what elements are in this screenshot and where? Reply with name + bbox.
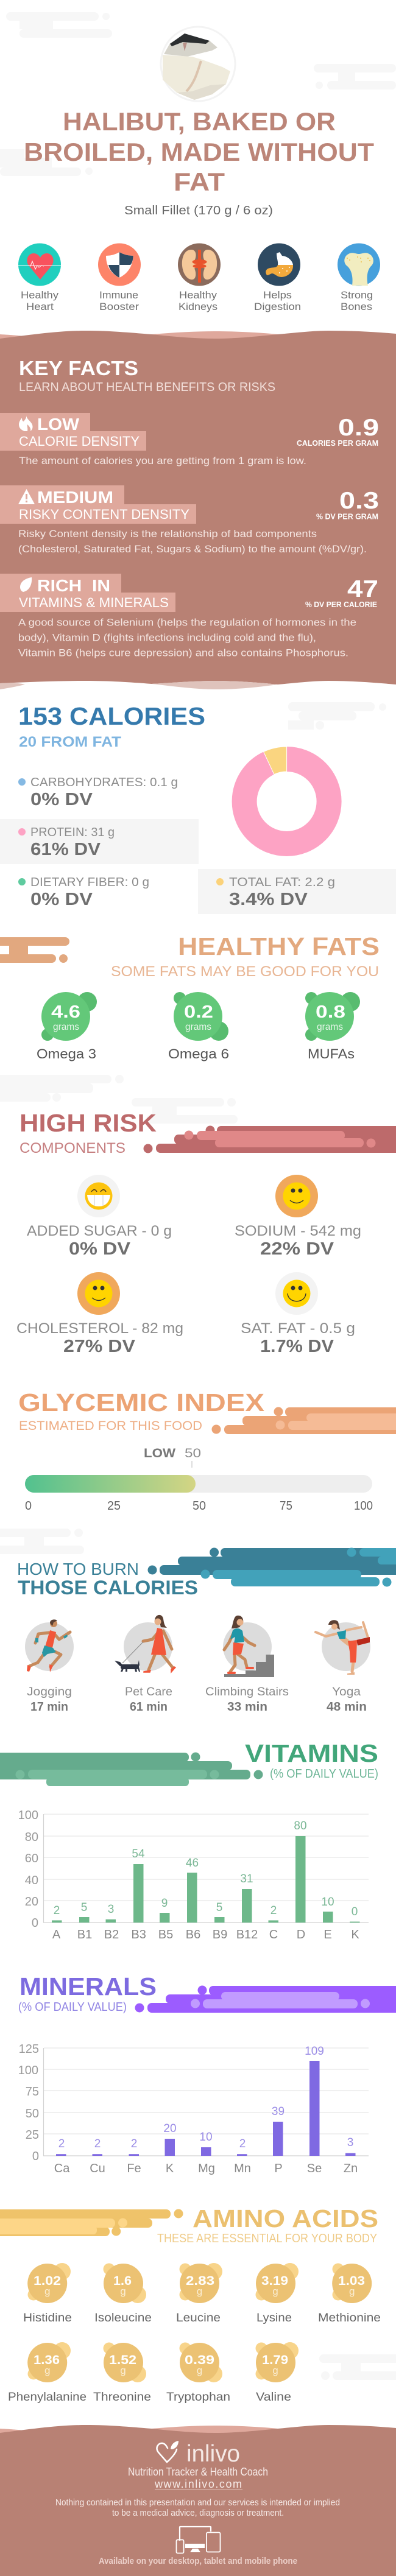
- bar chart: minerals: 39: [272, 2105, 285, 2118]
- bar chart: vitamins: 9: [161, 1897, 168, 1910]
- amino: isoleucine: [94, 2263, 152, 2324]
- gauge: glycemic value: [25, 1446, 373, 1513]
- title: [24, 107, 374, 196]
- subheading: fats: SOME FATS MAY BE GOOD FOR YOU: [111, 963, 379, 980]
- bar chart: minerals: 25: [26, 2128, 39, 2142]
- heading: amino acids: AMINO ACIDS: [193, 2205, 378, 2233]
- fat: mufas: grams: [317, 1022, 343, 1032]
- icon: warning: [18, 489, 35, 504]
- icon: immune booster: Booster: [99, 301, 140, 312]
- vitamins and minerals block: [0, 574, 378, 659]
- component: sodium: SODIUM - 542 mg: [235, 1223, 361, 1239]
- calorie density block: CALORIES PER GRAM: [297, 438, 378, 448]
- gauge: glycemic value: 0: [25, 1499, 32, 1513]
- fat: omega 3: grams: [53, 1022, 79, 1032]
- vitamins and minerals block: % DV PER CALORIE: [305, 600, 377, 609]
- amino: leucine: [176, 2263, 222, 2324]
- fat: omega 3: 4.6: [51, 1002, 80, 1022]
- serving size: Small Fillet (170 g / 6 oz): [124, 204, 273, 217]
- icon: helps digestion: [254, 244, 301, 312]
- activity: climbing stairs: Climbing Stairs: [205, 1686, 289, 1698]
- bar chart: vitamins: 80: [25, 1831, 38, 1844]
- component: added sugar: ADDED SUGAR - 0 g: [27, 1223, 172, 1239]
- bar chart: vitamins: 20: [25, 1895, 38, 1909]
- heading: glycemic index: GLYCEMIC INDEX: [18, 1388, 264, 1416]
- amino: leucine: Leucine: [176, 2312, 221, 2324]
- risky content density block: RISKY CONTENT DENSITY: [19, 507, 189, 522]
- fat: mufas: [305, 992, 360, 1061]
- macro: protein: PROTEIN: 31 g: [30, 826, 115, 839]
- bar chart: vitamins: 31: [240, 1873, 253, 1885]
- amino: lysine: g: [272, 2286, 278, 2297]
- activity: jogging: Jogging: [27, 1686, 72, 1698]
- icon: healthy kidneys: Healthy: [179, 290, 217, 301]
- risky content density block: 0.3: [339, 488, 379, 514]
- icon: flame: [19, 415, 33, 431]
- bar chart: minerals: Se: [307, 2162, 322, 2175]
- gauge: glycemic value: 25: [107, 1499, 121, 1513]
- amino: threonine: 1.52: [109, 2353, 136, 2367]
- subheading: components: COMPONENTS: [19, 1140, 126, 1156]
- logo: inlivo: inlivo: [186, 2441, 240, 2467]
- activity: yoga: Yoga: [332, 1686, 361, 1698]
- bar chart: minerals: 10: [199, 2131, 213, 2144]
- component: cholesterol: 27% DV: [63, 1337, 136, 1356]
- amino: histidine: Histidine: [23, 2312, 72, 2324]
- amino: phenylalanine: Phenylalanine: [8, 2391, 87, 2404]
- component: cholesterol: [16, 1272, 183, 1356]
- icon: strong bones: Bones: [341, 301, 372, 312]
- risky content density block: (Cholesterol, Saturated Fat, Sugars & Sodium) to the amount (%DV/gr).: [18, 543, 367, 555]
- activity: jogging: 17 min: [30, 1700, 68, 1714]
- bar chart: minerals: 50: [26, 2107, 39, 2120]
- decoration: fats bars: [0, 937, 69, 963]
- bar chart: vitamins: K: [351, 1928, 359, 1941]
- risky content density block: Risky Content density is the relationship of bad components: [18, 528, 317, 540]
- amino: isoleucine: Isoleucine: [94, 2312, 152, 2324]
- amino: threonine: g: [120, 2365, 126, 2376]
- amino: isoleucine: g: [120, 2286, 126, 2297]
- bar chart: vitamins: E: [324, 1928, 332, 1941]
- amino: phenylalanine: 1.36: [34, 2353, 60, 2367]
- bar chart: vitamins: 54: [132, 1848, 145, 1860]
- calorie density block: 0.9: [338, 415, 379, 441]
- heading: healthy fats: HEALTHY FATS: [178, 932, 380, 960]
- vitamins and minerals block: RICH IN: [37, 576, 110, 595]
- icon: devices: [177, 2527, 221, 2553]
- bar chart: vitamins: A: [52, 1928, 61, 1941]
- subheading: percent daily value: (% OF DAILY VALUE): [18, 2001, 127, 2014]
- panel: calories: [0, 702, 396, 914]
- risky content density block: % DV PER GRAM: [316, 512, 378, 521]
- bar chart: minerals: 20: [163, 2122, 177, 2135]
- amino: tryptophan: g: [197, 2365, 202, 2376]
- vitamins and minerals block: A good source of Selenium (helps the regulation of hormones in the: [18, 616, 356, 628]
- macro: carbohydrates: CARBOHYDRATES: 0.1 g: [30, 776, 178, 789]
- vitamins and minerals block: 47: [347, 576, 378, 602]
- bar chart: vitamins: 60: [25, 1852, 38, 1865]
- bar chart: minerals: P: [274, 2162, 283, 2175]
- amino: methionine: [318, 2263, 381, 2324]
- website link: www.inlivo.com: [154, 2478, 242, 2490]
- activity: yoga: 48 min: [327, 1700, 367, 1714]
- amino: leucine: g: [197, 2286, 202, 2297]
- subheading: percent daily value: (% OF DAILY VALUE): [270, 1767, 378, 1781]
- bar chart: minerals: 2: [131, 2138, 137, 2150]
- amino: valine: g: [272, 2365, 278, 2376]
- amino: methionine: g: [349, 2286, 355, 2297]
- bar chart: vitamins: B9: [213, 1928, 227, 1941]
- bar chart: minerals: Zn: [344, 2162, 358, 2175]
- activity: yoga: [316, 1620, 370, 1714]
- component: saturated fat: 1.7% DV: [260, 1337, 334, 1356]
- decoration: vitamin bars: [0, 1753, 263, 1786]
- subheading: estimated: ESTIMATED FOR THIS FOOD: [19, 1419, 202, 1433]
- component: added sugar: 0% DV: [69, 1239, 131, 1259]
- component: saturated fat: SAT. FAT - 0.5 g: [241, 1320, 355, 1337]
- macro: dietary fiber: [18, 876, 149, 909]
- disclaimer: [55, 2497, 340, 2518]
- amino: leucine: 2.83: [186, 2274, 214, 2288]
- activity: pet care: 61 min: [130, 1700, 168, 1714]
- icon: immune booster: Immune: [99, 290, 138, 301]
- decoration: burn bars: [147, 1548, 396, 1587]
- icon: leaf: [20, 577, 32, 592]
- bar chart: minerals: 109: [305, 2045, 324, 2058]
- macro: total fat: [216, 876, 335, 909]
- fat: omega 3: Omega 3: [37, 1046, 96, 1061]
- icon: helps digestion: Digestion: [254, 301, 301, 312]
- amino: phenylalanine: [8, 2342, 87, 2404]
- macro: carbohydrates: 0% DV: [30, 790, 93, 809]
- amino: isoleucine: 1.6: [113, 2274, 132, 2288]
- icon: immune booster: [98, 244, 141, 312]
- bar chart: minerals: Cu: [90, 2162, 105, 2175]
- panel: vitamins: [0, 1739, 378, 1941]
- bar chart: vitamins: 0: [352, 1906, 358, 1918]
- gauge: glycemic value: 75: [280, 1499, 292, 1513]
- activity: climbing stairs: 33 min: [227, 1700, 267, 1714]
- icon: strong bones: [338, 244, 380, 312]
- bar chart: vitamins: C: [269, 1928, 278, 1941]
- bar chart: vitamins: 5: [216, 1901, 222, 1914]
- gauge: glycemic value: LOW: [144, 1446, 175, 1460]
- icon: healthy heart: Heart: [26, 301, 54, 312]
- heading: minerals: MINERALS: [19, 1972, 157, 2001]
- bar chart: vitamins: 46: [186, 1857, 199, 1870]
- disclaimer: Nothing contained in this presentation and our services is intended or implied: [55, 2497, 340, 2508]
- title: HALIBUT, BAKED OR: [63, 107, 336, 136]
- health benefit icons: [18, 244, 380, 312]
- bar chart: vitamins: B2: [104, 1928, 119, 1941]
- amino: valine: [256, 2342, 299, 2404]
- amino: histidine: 1.02: [34, 2274, 61, 2288]
- bar chart: minerals: K: [166, 2162, 174, 2175]
- activity: pet care: [115, 1615, 175, 1714]
- risky content density block: [0, 485, 379, 555]
- bar chart: vitamins: 5: [81, 1901, 87, 1914]
- fat: omega 3: [37, 992, 97, 1061]
- panel: footer: [0, 2425, 396, 2576]
- amino: valine: Valine: [256, 2391, 291, 2404]
- fat: omega 6: 0.2: [184, 1002, 213, 1022]
- decoration: risk bars: [144, 1125, 396, 1153]
- bar chart: minerals: 2: [94, 2138, 101, 2150]
- icon: healthy kidneys: Kidneys: [179, 301, 217, 312]
- vitamins and minerals block: body), Vitamin D (fights infections including cold and the flu),: [18, 632, 316, 643]
- panel: amino acids: [0, 2205, 381, 2404]
- fat: omega 6: [168, 992, 229, 1061]
- bar chart: vitamins: 80: [294, 1820, 307, 1832]
- amino: tryptophan: Tryptophan: [166, 2391, 230, 2404]
- bar chart: minerals: 100: [18, 2064, 38, 2077]
- bar chart: minerals: 75: [26, 2085, 39, 2099]
- fat: mufas: MUFAs: [308, 1046, 355, 1061]
- title: FAT: [174, 167, 225, 196]
- amino: lysine: 3.19: [261, 2274, 288, 2288]
- decoration: glycemic bars: [212, 1407, 396, 1434]
- bar chart: minerals: Mn: [234, 2162, 251, 2175]
- activity: climbing stairs: [205, 1616, 289, 1714]
- bar chart: vitamins: 100: [18, 1809, 38, 1822]
- bar chart: minerals: 2: [58, 2138, 65, 2150]
- amino: valine: 1.79: [262, 2353, 288, 2367]
- risky content density block: MEDIUM: [37, 488, 113, 507]
- icon: healthy heart: [18, 244, 61, 312]
- gauge: glycemic value: 50: [185, 1446, 201, 1460]
- amino: threonine: Threonine: [93, 2391, 151, 2404]
- bar chart: vitamins: D: [297, 1928, 305, 1941]
- heading: key facts: KEY FACTS: [19, 357, 138, 379]
- panel: minerals: [18, 1972, 396, 2175]
- icon: healthy kidneys: [178, 244, 221, 312]
- bar chart: vitamins: 40: [25, 1874, 38, 1887]
- component: saturated fat: [241, 1272, 355, 1356]
- bar chart: vitamins: [18, 1809, 369, 1941]
- bar chart: vitamins: 2: [54, 1904, 60, 1917]
- gauge: glycemic value: 100: [354, 1499, 373, 1513]
- amino: histidine: [23, 2263, 72, 2324]
- fat: omega 6: Omega 6: [168, 1046, 229, 1061]
- heading: high risk: HIGH RISK: [19, 1109, 157, 1137]
- activity: jogging: [25, 1619, 74, 1714]
- subheading: LEARN ABOUT HEALTH BENEFITS OR RISKS: [19, 381, 275, 394]
- vitamins and minerals block: VITAMINS & MINERALS: [19, 595, 169, 610]
- macro: carbohydrates: [18, 776, 178, 809]
- bar chart: minerals: Ca: [54, 2162, 70, 2175]
- bar chart: vitamins: 0: [32, 1916, 38, 1930]
- component: added sugar: [27, 1175, 172, 1259]
- availability note: Available on your desktop, tablet and mobile phone: [99, 2556, 297, 2566]
- title: BROILED, MADE WITHOUT: [24, 138, 374, 166]
- amino: methionine: Methionine: [318, 2312, 381, 2324]
- macro: protein: 61% DV: [30, 840, 101, 859]
- amino: tryptophan: 0.39: [185, 2353, 214, 2367]
- bar chart: minerals: Mg: [198, 2162, 215, 2175]
- fat: omega 6: grams: [185, 1022, 211, 1032]
- bar chart: minerals: 3: [347, 2136, 353, 2149]
- calorie density block: The amount of calories you are getting from 1 gram is low.: [19, 455, 306, 466]
- panel: healthy fats: [0, 932, 380, 1061]
- calorie density block: [0, 413, 379, 466]
- macro: total fat: TOTAL FAT: 2.2 g: [229, 876, 335, 889]
- amino: lysine: [256, 2263, 299, 2324]
- heading: how to burn: HOW TO BURN: [17, 1560, 139, 1578]
- amino: lysine: Lysine: [256, 2312, 292, 2324]
- macro: protein: [18, 826, 115, 859]
- bar chart: vitamins: B1: [77, 1928, 92, 1941]
- header: food photo: [161, 27, 235, 101]
- panel: high risk components: [16, 1109, 396, 1356]
- calorie density block: LOW: [37, 415, 80, 434]
- heading: vitamins: VITAMINS: [245, 1739, 378, 1767]
- heading: those calories: THOSE CALORIES: [18, 1577, 198, 1599]
- vitamins and minerals block: Vitamin B6 (helps cure depression) and also contains Phosphorus.: [18, 647, 348, 659]
- bar chart: vitamins: 3: [108, 1903, 114, 1916]
- bar chart: vitamins: B12: [236, 1928, 258, 1941]
- panel: glycemic index: [18, 1388, 396, 1513]
- bar chart: minerals: Fe: [127, 2162, 141, 2175]
- amino: threonine: [93, 2342, 151, 2404]
- calorie density block: CALORIE DENSITY: [19, 434, 140, 449]
- decoration: mineral bars: [135, 1985, 396, 2013]
- panel: key facts: [0, 331, 396, 689]
- macro: total fat: 3.4% DV: [229, 890, 308, 909]
- activity: pet care: Pet Care: [125, 1686, 172, 1698]
- disclaimer: to be a medical advice, diagnosis or treatment.: [112, 2508, 284, 2518]
- component: sodium: 22% DV: [260, 1239, 334, 1259]
- bar chart: minerals: 0: [32, 2150, 39, 2163]
- bar chart: vitamins: B3: [131, 1928, 146, 1941]
- macro: dietary fiber: DIETARY FIBER: 0 g: [30, 876, 149, 889]
- component: cholesterol: CHOLESTEROL - 82 mg: [16, 1320, 183, 1337]
- subheading: from fat: 20 FROM FAT: [19, 734, 121, 750]
- macro: dietary fiber: 0% DV: [30, 890, 93, 909]
- logo: inlivo: [157, 2441, 240, 2467]
- bar chart: vitamins: 2: [270, 1904, 277, 1917]
- heading: calories: 153 CALORIES: [18, 702, 205, 730]
- bar chart: minerals: 125: [19, 2043, 39, 2056]
- fat: mufas: 0.8: [316, 1002, 345, 1022]
- bar chart: minerals: 2: [239, 2138, 246, 2150]
- icon: helps digestion: Helps: [263, 290, 292, 301]
- bar chart: vitamins: B6: [186, 1928, 200, 1941]
- bar chart: vitamins: B5: [158, 1928, 173, 1941]
- amino: tryptophan: [166, 2342, 230, 2404]
- amino: phenylalanine: g: [44, 2365, 50, 2376]
- bar chart: vitamins: 10: [321, 1896, 334, 1909]
- amino: histidine: g: [44, 2286, 50, 2297]
- tagline: Nutrition Tracker & Health Coach: [128, 2466, 268, 2478]
- donut chart: [244, 747, 329, 844]
- component: sodium: [235, 1175, 361, 1259]
- gauge: glycemic value: 50: [193, 1499, 206, 1513]
- bar chart: minerals: [18, 2043, 369, 2175]
- decoration: amino bars: [0, 2209, 183, 2236]
- panel: how to burn those calories: [17, 1548, 396, 1714]
- icon: strong bones: Strong: [341, 290, 373, 301]
- icon: healthy heart: Healthy: [21, 290, 59, 301]
- amino: methionine: 1.03: [338, 2274, 365, 2288]
